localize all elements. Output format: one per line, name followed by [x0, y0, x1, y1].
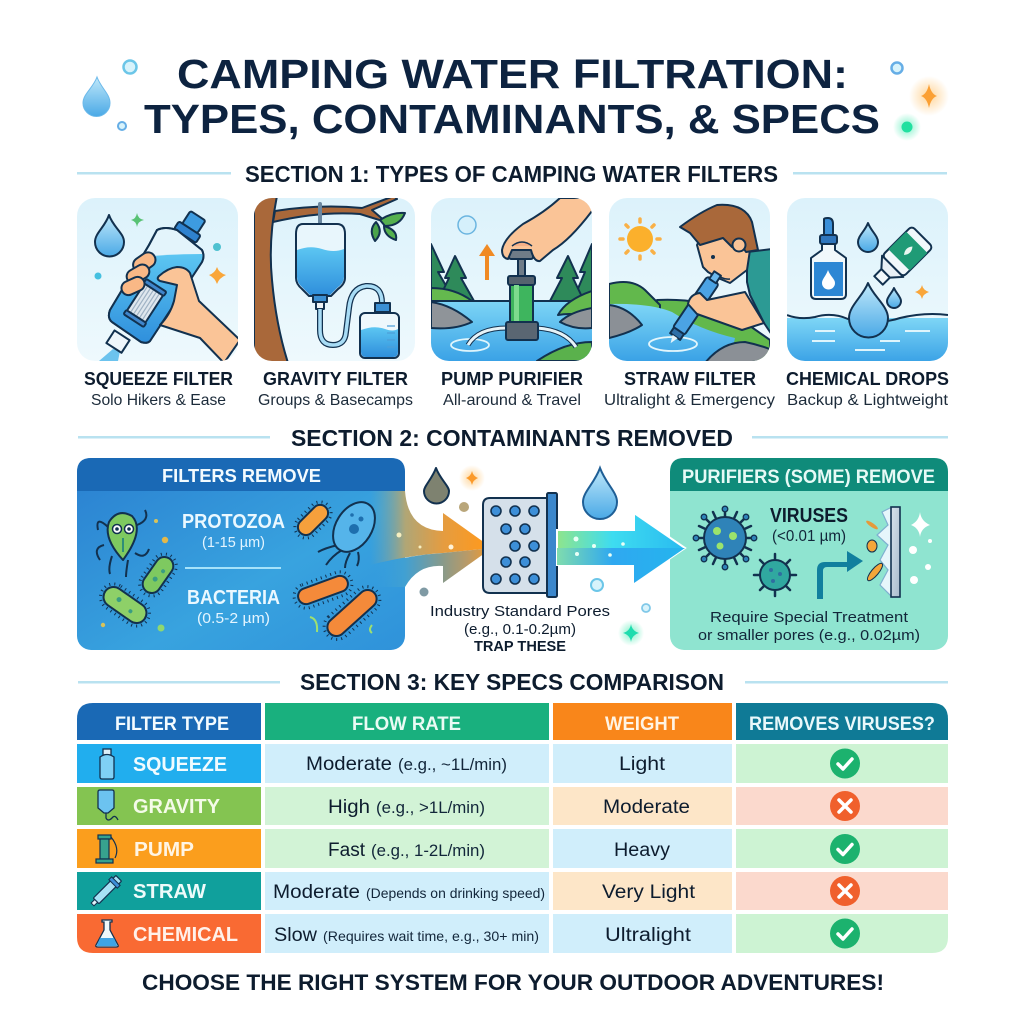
label: chemical drops: CHEMICAL DROPS — [786, 369, 949, 389]
heading: bacteria: BACTERIA — [187, 587, 280, 609]
icon: orange sparkle small — [459, 465, 485, 491]
arrow: filter to purifier — [557, 513, 685, 583]
icon: brown particle — [459, 502, 469, 512]
panel header — [77, 458, 405, 491]
icon: long orange bacterium — [319, 581, 385, 645]
row: squeeze: (e.g., ~1L/min) — [398, 755, 507, 774]
panel: squeeze filter — [77, 198, 240, 409]
icon: orange rod bacterium — [291, 568, 355, 612]
label: gravity filter: GRAVITY FILTER — [263, 369, 408, 389]
icon: bubble lower left — [118, 122, 126, 130]
icon: blue protozoan — [318, 495, 384, 568]
panel body — [670, 458, 948, 650]
heading: viruses: VIRUSES — [770, 505, 848, 527]
row: squeeze — [77, 744, 948, 783]
row: gravity: (e.g., >1L/min) — [376, 798, 485, 817]
icon: clean water drop — [583, 468, 617, 519]
icon: small green bacterium — [135, 549, 181, 601]
arrow: bent — [817, 551, 863, 599]
illustration: gravity bag on tree — [254, 196, 415, 363]
row: chemical — [77, 914, 948, 953]
panel: filters remove — [77, 458, 492, 650]
icon: cross — [830, 791, 860, 821]
caption: squeeze filter: Solo Hikers & Ease — [91, 392, 226, 409]
icon: grey particle — [420, 588, 428, 596]
row: gravity: Moderate — [603, 797, 690, 818]
caption: chemical drops: Backup & Lightweight — [787, 392, 949, 409]
text: special treatment: or smaller pores (e.g., 0.02µm) — [698, 627, 920, 644]
header: filter type: FILTER TYPE — [115, 714, 229, 735]
row: straw: Very Light — [602, 882, 696, 903]
illustration: squeeze bottle in hand — [77, 198, 240, 363]
icon: large virus — [693, 506, 757, 570]
panel: chemical drops — [784, 198, 954, 409]
icon: check — [830, 748, 860, 778]
text: bacteria size: (0.5-2 µm) — [197, 610, 270, 627]
icon: check — [830, 918, 860, 948]
icon: large green bacterium — [95, 579, 155, 631]
row: gravity — [77, 787, 948, 825]
panel: straw filter — [604, 198, 775, 409]
illustration: chemical drop bottles — [784, 198, 954, 362]
row: gravity: High — [328, 797, 370, 818]
row: straw: (Depends on drinking speed) — [366, 885, 545, 901]
icon: brown dirty drop — [424, 468, 449, 504]
heading: protozoa: PROTOZOA — [182, 511, 285, 533]
illustration: hand pump in lake — [431, 198, 592, 361]
header: weight: WEIGHT — [605, 714, 679, 735]
icon: membrane with blocked particles — [865, 507, 900, 597]
icon: filter block with pores — [483, 493, 557, 597]
row: gravity: GRAVITY — [133, 796, 221, 818]
panel: gravity filter — [254, 196, 415, 409]
text: special treatment: Require Special Treatment — [710, 609, 909, 626]
section 1 heading: SECTION 1: TYPES OF CAMPING WATER FILTERS — [245, 161, 778, 187]
icon: teal sparkle — [618, 620, 644, 646]
icon: green dot — [893, 113, 921, 141]
icon: mini pump — [96, 835, 117, 863]
label: straw filter: STRAW FILTER — [624, 369, 756, 389]
row: pump: PUMP — [134, 839, 194, 861]
title — [144, 51, 880, 142]
section 3 heading: SECTION 3: KEY SPECS COMPARISON — [300, 669, 724, 695]
icon: mini flask — [96, 920, 118, 947]
row: chemical: Slow — [274, 925, 317, 946]
row: pump — [77, 829, 948, 868]
row: squeeze: Moderate — [306, 754, 392, 775]
row: squeeze: Light — [619, 754, 666, 775]
icon: mini gravity bag — [98, 790, 118, 820]
icon: check — [830, 834, 860, 864]
label: pump purifier: PUMP PURIFIER — [441, 369, 583, 389]
panel: pump purifier — [431, 198, 592, 409]
row: straw: STRAW — [133, 881, 206, 903]
row: straw — [77, 872, 948, 910]
icon: bubble top left — [124, 60, 136, 74]
icon: cross — [830, 876, 860, 906]
icon: bubble — [591, 579, 603, 591]
text: special treatment — [698, 609, 920, 644]
icon: title water drop — [83, 77, 110, 116]
label: squeeze filter: SQUEEZE FILTER — [84, 369, 233, 389]
caption: gravity filter: Groups & Basecamps — [258, 392, 413, 409]
header: weight — [553, 703, 732, 740]
text: industry standard pores: Industry Standard Pores — [430, 603, 610, 620]
icon: mini bottle — [100, 749, 114, 779]
caption: straw filter: Ultralight & Emergency — [604, 392, 775, 409]
icon: orange sparkle — [909, 76, 949, 116]
row: straw: Moderate — [273, 882, 360, 903]
icon: green protozoan — [97, 510, 149, 577]
decorative sparkles — [909, 512, 932, 584]
panel: purifiers remove — [670, 458, 948, 650]
header: removes viruses: REMOVES VIRUSES? — [749, 714, 935, 735]
header: filter type — [77, 703, 261, 740]
table: key specs comparison — [77, 703, 948, 953]
icon: small virus — [754, 554, 796, 596]
icon: bubble top right — [892, 62, 902, 74]
title: TYPES, CONTAMINANTS, & SPECS — [144, 96, 880, 142]
header: flow rate — [265, 703, 549, 740]
header: removes viruses — [736, 703, 948, 740]
header: flow rate: FLOW RATE — [352, 714, 461, 735]
caption: pump purifier: All-around & Travel — [443, 392, 581, 409]
title: CAMPING WATER FILTRATION: — [177, 51, 848, 97]
decorative particles — [101, 519, 454, 633]
footer call to action: CHOOSE THE RIGHT SYSTEM FOR YOUR OUTDOOR ADVENTURES! — [142, 970, 884, 995]
heading: purifiers remove: PURIFIERS (SOME) REMOVE — [682, 467, 935, 488]
row: chemical: CHEMICAL — [133, 924, 238, 946]
row: pump: Fast — [328, 840, 366, 861]
icon: mini straw — [88, 874, 123, 909]
row: pump: Heavy — [614, 840, 671, 861]
section 2 heading: SECTION 2: CONTAMINANTS REMOVED — [291, 425, 733, 451]
text: protozoa size: (1-15 µm) — [202, 534, 265, 551]
panel header — [670, 458, 948, 491]
icon: orange bean bacterium — [290, 497, 336, 543]
text: virus size: (<0.01 µm) — [772, 528, 846, 545]
row: pump: (e.g., 1-2L/min) — [371, 841, 485, 860]
heading: filters remove: FILTERS REMOVE — [162, 466, 321, 486]
row: chemical: Ultralight — [605, 925, 692, 946]
text: industry standard pores — [430, 603, 610, 655]
icon: bubble small — [642, 604, 650, 612]
row: squeeze: SQUEEZE — [133, 754, 227, 776]
row: chemical: (Requires wait time, e.g., 30+ min) — [323, 928, 539, 944]
text: industry standard pores: TRAP THESE — [474, 638, 566, 655]
panel body — [77, 458, 405, 650]
text: industry standard pores: (e.g., 0.1-0.2µm) — [464, 621, 576, 638]
illustration: person drinking through straw — [609, 198, 772, 363]
arrow cutout and orange arrow — [370, 491, 492, 587]
